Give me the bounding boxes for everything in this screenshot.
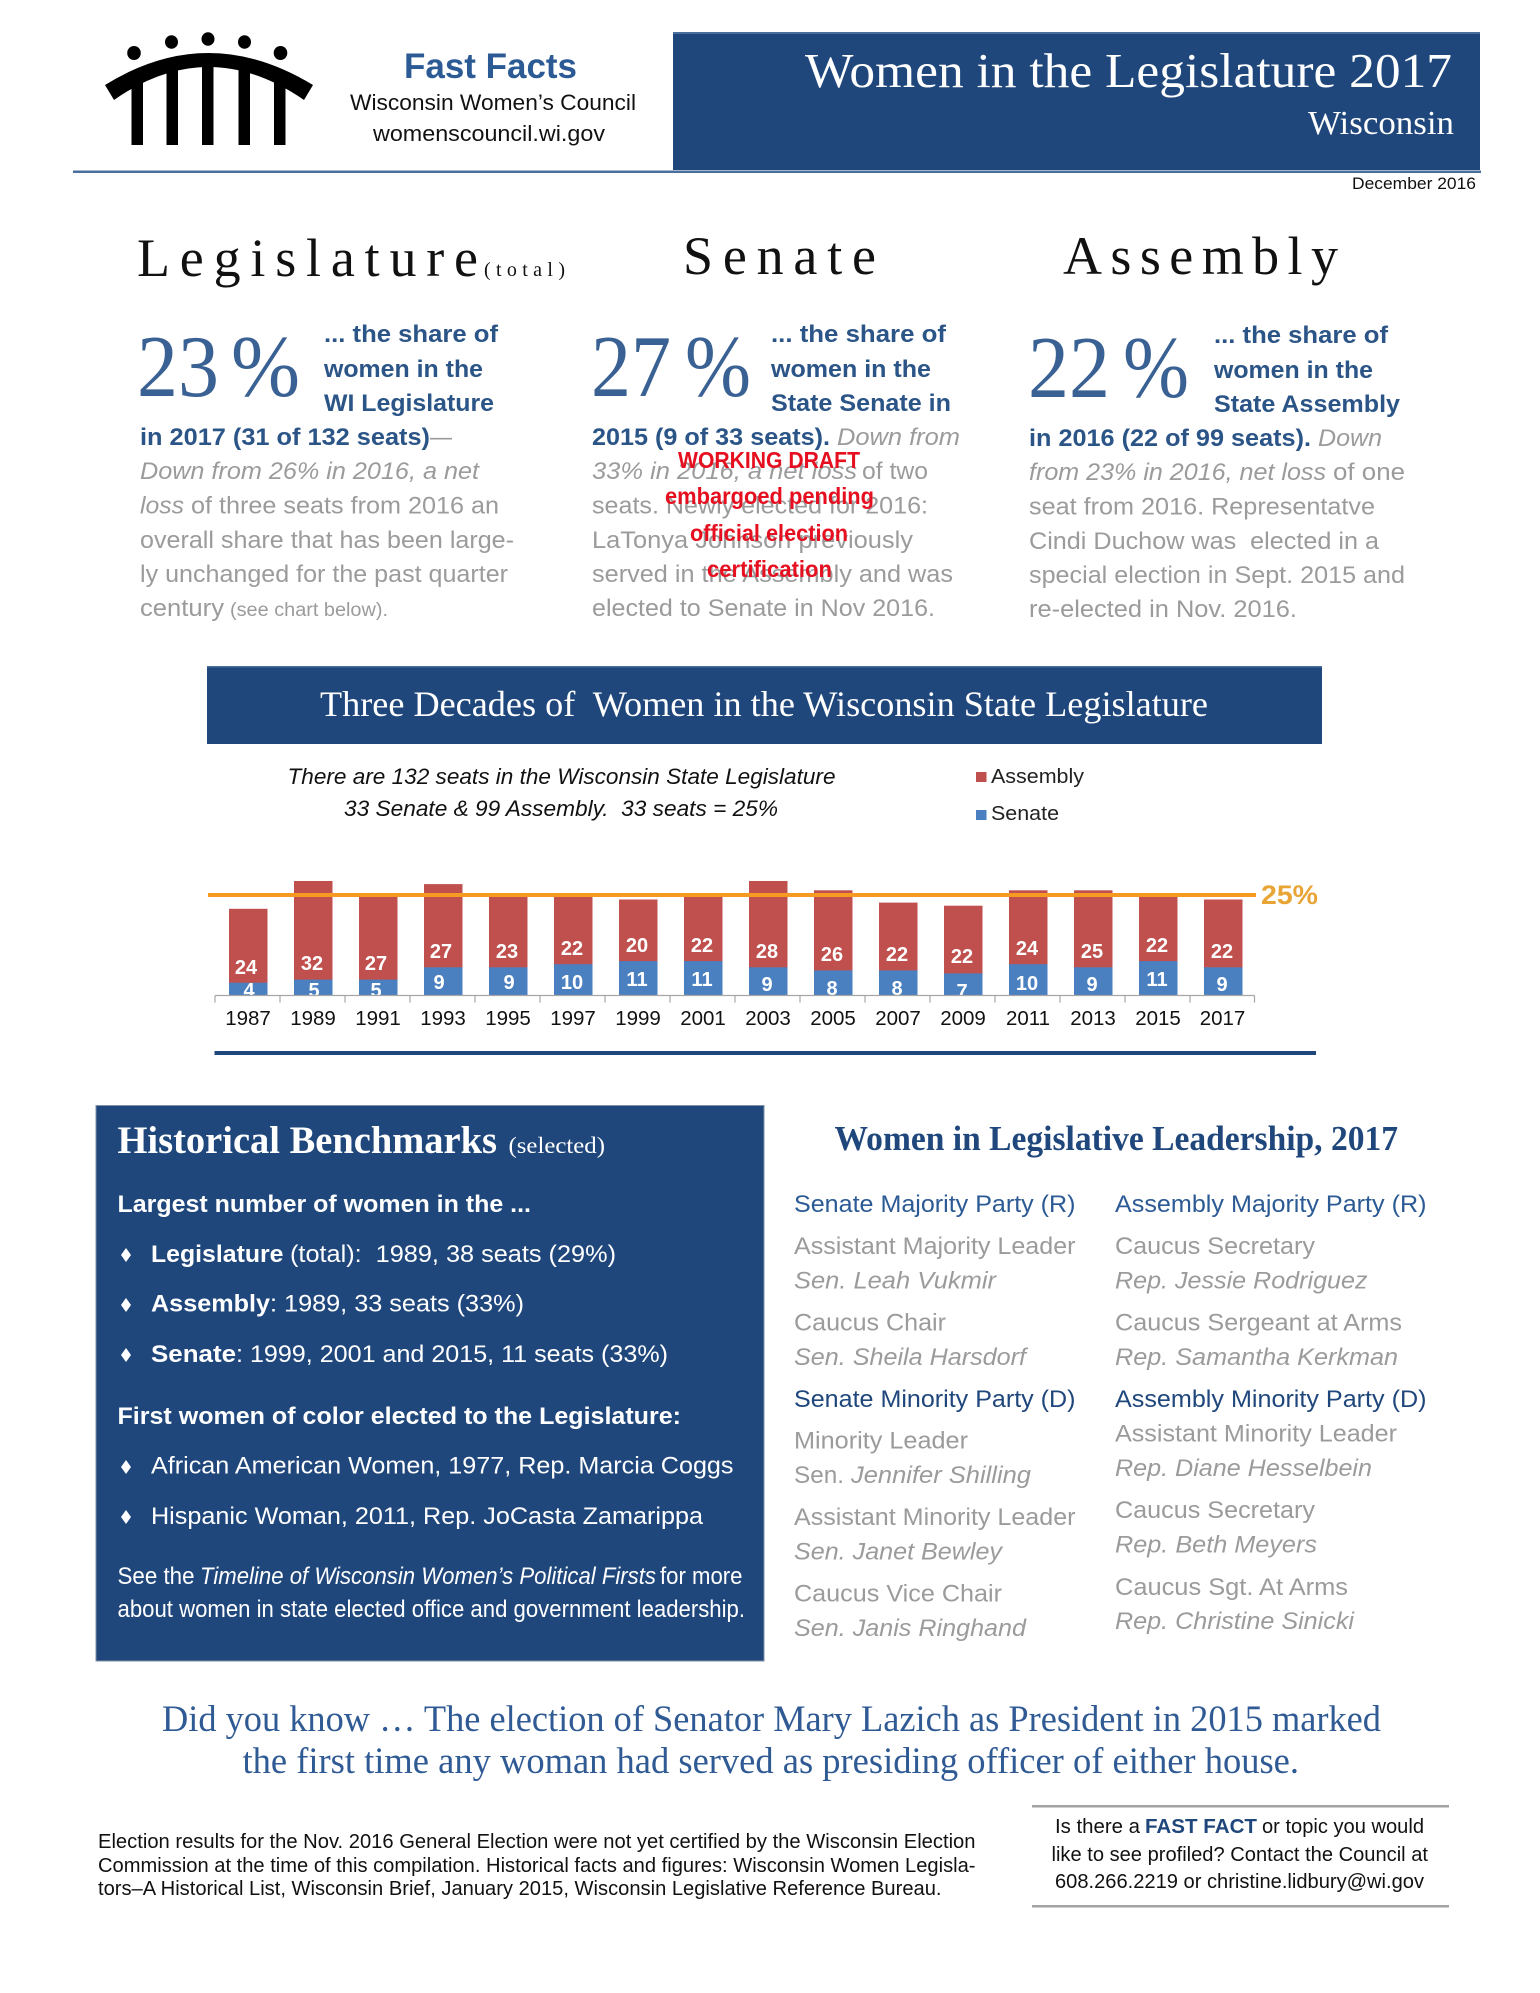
panel: three decades chart (205, 666, 1322, 1055)
senate value labels: 8 (826, 978, 838, 1000)
chart note: 33 Senate & 99 Assembly. 33 seats = 25% (344, 796, 778, 821)
panel heading: (selected) (508, 1133, 605, 1158)
largest number list: Legislature (151, 1241, 284, 1268)
big number: % (685, 319, 751, 416)
contact box: or topic you would (1262, 1816, 1424, 1838)
x axis (215, 996, 1254, 1002)
senate leaders column: Sen. Leah Vukmir (794, 1268, 997, 1294)
body text: of three seats from 2016 an (191, 492, 499, 520)
title banner (673, 32, 1480, 170)
body text: elected to Senate in Nov 2016. (592, 595, 935, 622)
contact box: Is there a (1055, 1816, 1141, 1838)
25 percent label: 25% (1261, 880, 1318, 910)
first women of color list: Hispanic Woman, 2011, Rep. JoCasta Zamarippa (151, 1503, 703, 1530)
lead text: women in the (1213, 357, 1373, 384)
assembly value labels: 26 (821, 944, 843, 966)
senate value labels: 5 (370, 980, 382, 1002)
did you know callout: the first time any woman had served as presiding officer of either house. (242, 1741, 1299, 1782)
year labels: 2015 (1135, 1007, 1181, 1030)
lead text: WI Legislature (324, 390, 494, 417)
body text: LaTonya Johnson previously (592, 527, 914, 554)
year labels: 1993 (420, 1007, 466, 1030)
year labels: 1997 (550, 1007, 596, 1030)
panel: historical benchmarks (96, 1106, 764, 1661)
date: December 2016 (1352, 174, 1476, 193)
organisation name: womenscouncil.wi.gov (372, 121, 605, 146)
timeline note (118, 1563, 745, 1623)
body text: ly unchanged for the past quarter (140, 561, 508, 588)
body text: seat from 2016. Representatve (1029, 494, 1375, 520)
organisation name (350, 47, 636, 146)
first women of color list (118, 1403, 734, 1530)
assembly bars (229, 881, 1242, 996)
year labels: 2001 (680, 1007, 726, 1030)
year labels (225, 1007, 1245, 1030)
senate bars (229, 961, 1242, 995)
assembly value labels: 28 (756, 941, 778, 963)
year labels: 1991 (355, 1007, 401, 1030)
chart banner (207, 666, 1322, 744)
assembly leaders column: Assembly Majority Party (R) (1115, 1191, 1426, 1218)
year labels: 1989 (290, 1007, 336, 1030)
assembly leaders column: Rep. Diane Hesselbein (1115, 1455, 1372, 1482)
lead text: ... the share of (771, 321, 947, 348)
panel: Senate (591, 226, 960, 622)
icon: Wisconsin Women's Council logo (105, 32, 313, 145)
lead text: women in the (323, 356, 483, 383)
assembly value labels: 27 (365, 953, 387, 975)
body text: 33% in 2016, a net loss (592, 458, 857, 485)
year labels: 2007 (875, 1007, 921, 1030)
assembly value labels: 22 (886, 944, 908, 966)
year labels: 2003 (745, 1007, 791, 1030)
big number (137, 319, 300, 416)
heading: Legislature (137, 228, 478, 288)
body text: loss (140, 492, 184, 520)
legend: Senate (991, 803, 1059, 825)
assembly leaders column: Rep. Beth Meyers (1115, 1532, 1317, 1558)
senate value labels: 11 (691, 969, 713, 991)
largest number list: Assembly (151, 1290, 270, 1318)
lead text: 2015 (9 of 33 seats). (592, 424, 830, 451)
year labels: 2009 (940, 1007, 986, 1030)
lead text: women in the (770, 356, 931, 383)
senate value labels: 7 (956, 981, 968, 1003)
title banner: Wisconsin (1308, 105, 1454, 142)
lead text (140, 321, 499, 451)
largest number list: : 1989, 33 seats (33%) (270, 1290, 524, 1318)
assembly value labels: 24 (1016, 938, 1039, 960)
footnote: tors–A Historical List, Wisconsin Brief, January 2015, Wisconsin Legislative Reference Bureau. (98, 1878, 941, 1900)
senate leaders column (794, 1191, 1076, 1642)
senate value labels (243, 969, 1228, 1003)
senate leaders column: Assistant Majority Leader (794, 1233, 1076, 1260)
senate leaders column: Sen. (794, 1462, 844, 1489)
senate value labels: 9 (503, 972, 515, 994)
senate value labels: 9 (761, 974, 773, 996)
footnote: Election results for the Nov. 2016 General Election were not yet certified by the Wisconsin Election (98, 1831, 976, 1853)
first women of color list: African American Women, 1977, Rep. Marcia Coggs (151, 1452, 734, 1480)
big number (591, 319, 751, 416)
footnote: Commission at the time of this compilation. Historical facts and figures: Wisconsin Women Legisla- (98, 1855, 976, 1877)
body text: of two (862, 458, 928, 485)
senate value labels: 9 (1086, 974, 1098, 996)
largest number list (118, 1191, 668, 1368)
working draft notice: certification (707, 556, 832, 582)
assembly value labels: 23 (496, 941, 518, 963)
assembly leaders column: Assembly Minority Party (D) (1115, 1386, 1426, 1413)
contact box: 608.266.2219 or christine.lidbury@wi.gov (1055, 1871, 1424, 1893)
assembly leaders column: Caucus Sgt. At Arms (1115, 1574, 1348, 1601)
panel: women in legislative leadership (794, 1119, 1426, 1642)
year labels: 1999 (615, 1007, 661, 1030)
senate leaders column: Jennifer Shilling (850, 1462, 1031, 1489)
year labels: 2011 (1006, 1007, 1050, 1030)
legend: Assembly (991, 766, 1084, 788)
lead text: in 2017 (31 of 132 seats) (140, 424, 430, 451)
largest number list: Largest number of women in the ... (118, 1191, 531, 1218)
senate leaders column: Assistant Minority Leader (794, 1504, 1076, 1531)
lead text (1029, 322, 1400, 452)
senate leaders column: Senate Majority Party (R) (794, 1191, 1076, 1218)
lead text: ... the share of (1214, 322, 1389, 349)
body text: from 23% in 2016, net loss (1029, 459, 1326, 486)
senate value labels: 9 (433, 972, 445, 994)
contact box: like to see profiled? Contact the Council at (1052, 1844, 1428, 1866)
assembly leaders column: Rep. Samantha Kerkman (1115, 1344, 1398, 1371)
big number: 27 (591, 319, 671, 416)
senate value labels: 10 (1016, 973, 1038, 995)
contact box: FAST FACT (1145, 1816, 1257, 1838)
working draft notice: embargoed pending (665, 483, 874, 509)
largest number list: (total): 1989, 38 seats (29%) (290, 1241, 616, 1268)
title banner: Women in the Legislature 2017 (805, 43, 1452, 98)
senate leaders column: Caucus Chair (794, 1310, 946, 1336)
stacked bar chart (205, 880, 1318, 1030)
senate value labels: 4 (243, 980, 255, 1002)
senate leaders column: Senate Minority Party (D) (794, 1386, 1076, 1413)
chart bottom rule (214, 1051, 1316, 1055)
assembly value labels: 22 (691, 935, 713, 957)
heading: (total) (484, 259, 565, 281)
assembly value labels: 22 (1146, 935, 1168, 957)
panel: Legislature total (137, 228, 565, 622)
largest number list: : 1999, 2001 and 2015, 11 seats (33%) (236, 1341, 668, 1368)
big number (1028, 320, 1189, 417)
assembly value labels: 24 (235, 957, 258, 979)
senate leaders column: Caucus Vice Chair (794, 1580, 1002, 1608)
assembly value labels: 27 (430, 941, 452, 963)
organisation name: Fast Facts (404, 47, 577, 86)
lead text: ... the share of (324, 321, 499, 348)
panel heading: Women in Legislative Leadership, 2017 (834, 1119, 1398, 1158)
assembly value labels (235, 935, 1233, 979)
senate leaders column: Minority Leader (794, 1428, 968, 1454)
chart note: There are 132 seats in the Wisconsin State Legislature (288, 764, 836, 789)
assembly leaders column (1115, 1191, 1426, 1635)
body text: Down from (837, 424, 960, 451)
did you know callout (162, 1699, 1381, 1782)
big number: 23 (137, 319, 219, 416)
assembly leaders column: Caucus Secretary (1115, 1497, 1316, 1524)
did you know callout: Did you know … The election of Senator Mary Lazich as President in 2015 marked (162, 1699, 1381, 1740)
body text: of one (1333, 459, 1405, 486)
lead text: in 2016 (22 of 99 seats). (1029, 425, 1311, 452)
legend (976, 766, 1084, 825)
footnote (98, 1831, 976, 1900)
chart note (288, 764, 836, 821)
working draft notice (665, 447, 874, 582)
body text: century (140, 595, 225, 622)
heading: Senate (683, 226, 876, 286)
panel heading: Historical Benchmarks (118, 1119, 497, 1162)
body text: overall share that has been large- (140, 527, 514, 554)
big number: % (231, 319, 300, 416)
body text (140, 424, 514, 622)
body text: Down (1318, 425, 1382, 452)
organisation name: Wisconsin Women’s Council (350, 90, 636, 115)
body text: seats. Newly elected for 2016: (592, 492, 928, 520)
header (73, 32, 1481, 193)
year labels: 1995 (485, 1007, 531, 1030)
lead text (592, 321, 951, 451)
assembly leaders column: Caucus Sergeant at Arms (1115, 1310, 1402, 1336)
panel: Assembly (1028, 226, 1405, 623)
body text: re-elected in Nov. 2016. (1029, 596, 1297, 623)
assembly value labels: 25 (1081, 941, 1103, 963)
body text: Down from 26% in 2016, a net (140, 458, 480, 485)
body text (1029, 425, 1405, 623)
working draft notice: official election (690, 520, 848, 546)
assembly value labels: 20 (626, 935, 648, 957)
senate value labels: 11 (1146, 969, 1168, 991)
year labels: 2013 (1070, 1007, 1116, 1030)
assembly value labels: 22 (951, 946, 973, 968)
assembly leaders column: Rep. Christine Sinicki (1115, 1608, 1355, 1635)
senate value labels: 8 (891, 978, 903, 1000)
header rule (73, 170, 1481, 173)
senate value labels: 9 (1216, 974, 1228, 996)
assembly leaders column: Caucus Secretary (1115, 1233, 1316, 1260)
senate value labels: 11 (626, 969, 648, 991)
body text: — (430, 424, 452, 451)
body text (592, 424, 960, 622)
assembly value labels: 22 (1211, 941, 1233, 963)
body text: Cindi Duchow was elected in a (1029, 528, 1379, 555)
contact box (1032, 1805, 1449, 1908)
working draft notice: WORKING DRAFT (678, 447, 860, 473)
lead text: State Senate in (771, 390, 951, 417)
timeline note: about women in state elected office and government leadership. (118, 1596, 745, 1623)
timeline note: See the (118, 1563, 194, 1590)
senate value labels: 10 (561, 972, 583, 994)
senate leaders column: Sen. Janet Bewley (794, 1538, 1004, 1566)
timeline note: for more (660, 1563, 742, 1590)
assembly value labels: 22 (561, 938, 583, 960)
senate value labels: 5 (308, 980, 320, 1002)
largest number list: Senate (151, 1341, 236, 1368)
year labels: 1987 (225, 1007, 271, 1030)
body text: (see chart below). (230, 600, 388, 621)
body text: served in the Assembly and was (592, 561, 953, 588)
senate leaders column: Sen. Janis Ringhand (794, 1615, 1027, 1642)
timeline note: Timeline of Wisconsin Women’s Political Firsts (200, 1563, 656, 1590)
senate leaders column: Sen. Sheila Harsdorf (794, 1344, 1028, 1371)
big number: % (1123, 320, 1189, 417)
body text: special election in Sept. 2015 and (1029, 562, 1405, 589)
big number: 22 (1028, 320, 1110, 417)
assembly value labels: 32 (301, 953, 323, 975)
chart banner: Three Decades of Women in the Wisconsin State Legislature (320, 684, 1208, 724)
heading: Assembly (1063, 226, 1338, 286)
assembly leaders column: Rep. Jessie Rodriguez (1115, 1268, 1368, 1294)
lead text: State Assembly (1214, 391, 1400, 418)
25 percent line (208, 893, 1256, 897)
first women of color list: First women of color elected to the Legislature: (118, 1403, 681, 1430)
year labels: 2017 (1200, 1007, 1245, 1030)
year labels: 2005 (810, 1007, 856, 1030)
assembly leaders column: Assistant Minority Leader (1115, 1420, 1397, 1448)
